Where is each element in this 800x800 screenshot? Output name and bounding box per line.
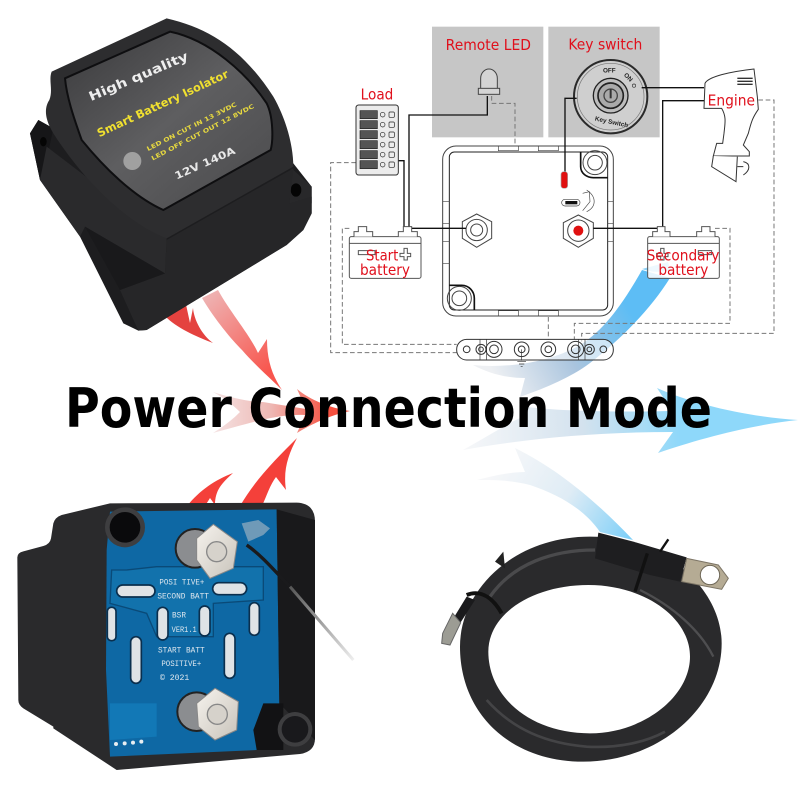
product photo: battery cable <box>442 533 728 762</box>
label text: High quality <box>86 48 191 104</box>
board printed text: SECOND BATT <box>157 591 209 601</box>
labels: diagram captions: Secondary <box>647 248 720 265</box>
arrows: red arrows converging on title <box>160 290 350 506</box>
wiring: solid power lines <box>398 88 704 228</box>
labels: diagram captions: battery <box>360 262 410 279</box>
isolator mounting tabs <box>30 120 312 203</box>
icon: start battery <box>349 227 421 278</box>
ring lug <box>682 558 728 589</box>
bus bar <box>457 339 613 367</box>
board slots <box>107 583 259 683</box>
mounting boss: top <box>105 507 145 547</box>
terminal nut: top <box>176 524 237 578</box>
labels: diagram captions <box>360 36 755 279</box>
product photo: isolator open circuit board <box>17 503 353 770</box>
wiring diagram <box>331 27 774 367</box>
cable ties <box>467 539 668 613</box>
panel: key switch: OFF <box>603 68 616 75</box>
labels: diagram captions: Remote LED <box>446 37 531 54</box>
fuse: black <box>562 199 580 206</box>
terminal: red post <box>573 226 583 236</box>
board printed text: © 2021 <box>160 673 189 683</box>
board printed text: BSR <box>172 610 186 620</box>
circuit board <box>106 509 279 757</box>
panel: key switch: ON <box>622 72 634 84</box>
label text: Smart Battery Isolator <box>95 67 231 140</box>
board printed text: POSI TIVE+ <box>159 578 204 588</box>
labels: diagram captions: Engine <box>708 92 755 109</box>
label text: 12V 140A <box>173 145 237 182</box>
LED on board <box>242 520 270 542</box>
LED window <box>123 152 141 170</box>
isolator label plate <box>65 32 272 210</box>
labels: diagram captions: Start <box>366 248 399 265</box>
fuse: red <box>561 172 568 188</box>
board printed text: VER1.1 <box>172 625 197 635</box>
icon: load switch panel <box>356 105 398 175</box>
holes in board <box>114 740 143 746</box>
heat shrink sleeve <box>595 533 687 582</box>
labels: diagram captions: Key switch <box>568 36 642 53</box>
terminal nut: bottom <box>177 688 238 740</box>
arrows: blue arrows leaving title <box>463 262 798 540</box>
title: Power Connection Mode <box>65 377 712 440</box>
panel: key switch <box>548 27 660 137</box>
main isolator outline <box>443 146 613 316</box>
panel: remote LED <box>432 27 543 137</box>
label text: LED ON CUT IN 13 3VDC <box>146 101 239 153</box>
board printed text: START BATT <box>158 645 205 655</box>
product photo: smart battery isolator <box>30 18 312 331</box>
icon: secondary battery <box>648 227 719 278</box>
board printed text: POSITIVE+ <box>161 659 201 669</box>
labels: diagram captions: Load <box>361 86 393 103</box>
housing <box>17 503 315 770</box>
isolator body silhouette <box>30 18 312 331</box>
label text: LED OFF CUT OUT 12 8VDC <box>150 103 256 162</box>
wire: LED lead <box>247 545 353 660</box>
cable ring <box>460 537 722 762</box>
isolator top cap <box>46 18 293 238</box>
icon: outboard engine <box>704 69 758 182</box>
isolator skirt and wedge <box>40 147 167 290</box>
small lug end <box>442 597 475 645</box>
mounting boss: bottom <box>253 703 312 750</box>
panel: key switch: Key Switch <box>594 116 629 129</box>
labels: diagram captions: battery <box>658 262 709 279</box>
label text <box>86 48 256 182</box>
wiring: dashed ground lines <box>331 96 774 353</box>
board printed text <box>157 578 209 683</box>
isolator front face <box>120 168 312 331</box>
